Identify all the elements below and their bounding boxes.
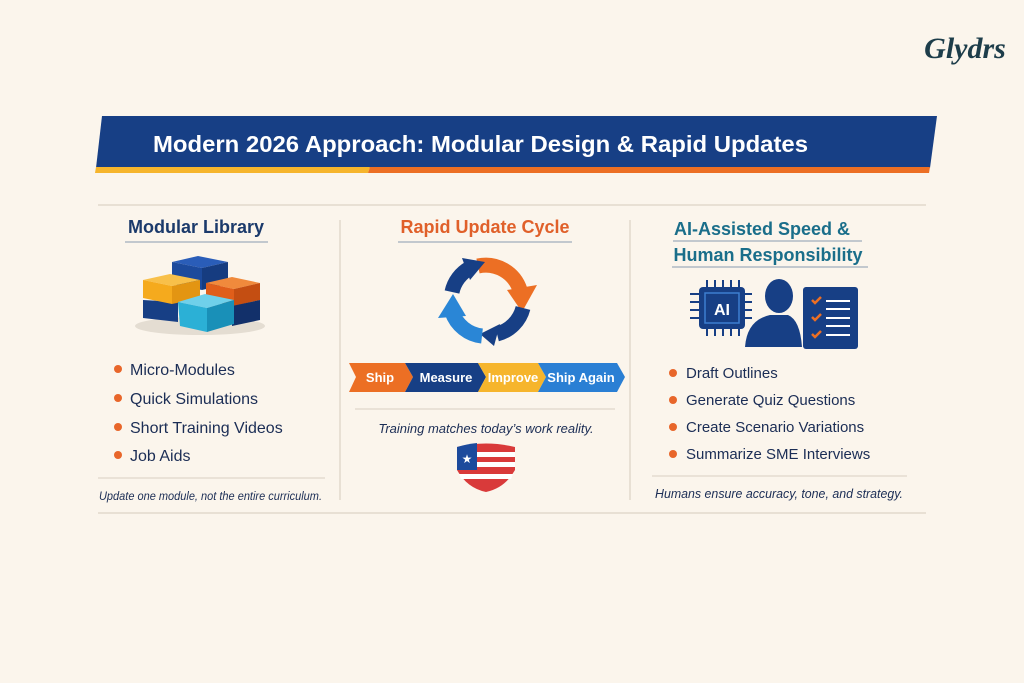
chevron process: Improve [488, 370, 538, 385]
chevron process: Measure [420, 370, 472, 385]
bullet list: Create Scenario Variations [686, 419, 864, 436]
bullet list: Generate Quiz Questions [686, 392, 855, 409]
bullet list: Summarize SME Interviews [686, 446, 870, 463]
heading: ai-assisted [673, 219, 863, 265]
heading: ai-assisted: Human Responsibility [673, 245, 863, 265]
bullet list: Short Training Videos [130, 420, 283, 437]
caption: Training matches today’s work reality. [378, 421, 594, 436]
chevron process [349, 363, 625, 392]
lower blue left [143, 300, 178, 322]
cyan front [178, 294, 234, 308]
panel: modular library [98, 217, 325, 503]
bullet list: Micro-Modules [130, 362, 235, 379]
icon: checklist [803, 287, 858, 349]
caption: Humans ensure accuracy, tone, and strategy. [655, 487, 903, 501]
bullet list [669, 365, 870, 463]
icon: blocks [135, 256, 265, 335]
icon: flag shield [457, 443, 515, 492]
orange right [206, 277, 260, 289]
chevron process: Ship [366, 370, 394, 385]
heading: modular library: Modular Library [128, 217, 264, 237]
icon: person [745, 279, 802, 347]
icon: cycle arrows [438, 258, 537, 346]
logo: Glydrs [924, 32, 1006, 65]
panel: ai-assisted [652, 219, 907, 501]
icon: ai chip [690, 280, 752, 336]
title banner [95, 116, 937, 173]
lower blue right [232, 300, 260, 326]
icon: ai chip: AI [714, 302, 730, 319]
bullet list: Job Aids [130, 448, 190, 465]
back top blue [172, 256, 228, 268]
icon: flag shield: ★ [462, 452, 472, 466]
heading: rapid update cycle: Rapid Update Cycle [400, 217, 570, 237]
bullet list [114, 362, 283, 465]
heading: ai-assisted: AI-Assisted Speed & [674, 219, 850, 239]
bullet list: Quick Simulations [130, 391, 258, 408]
panel: rapid update cycle [349, 217, 625, 492]
yellow [143, 274, 200, 286]
chevron process: Ship Again [547, 370, 615, 385]
caption: Update one module, not the entire curriculum. [99, 489, 322, 503]
title: Modern 2026 Approach: Modular Design & Rapid Updates [153, 131, 808, 157]
bullet list: Draft Outlines [686, 365, 778, 382]
